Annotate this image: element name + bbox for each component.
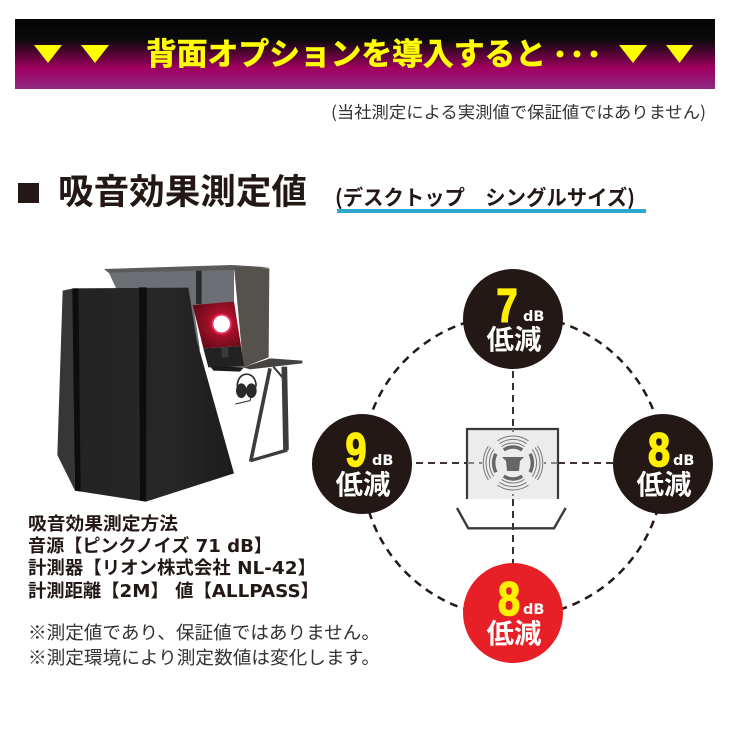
- banner dots: [556, 50, 598, 58]
- badge: rear 8 dB: 低減: [486, 611, 542, 651]
- badge: left 9 dB: [312, 414, 412, 514]
- monitor stand and keyboard: [203, 346, 244, 367]
- notes: ※測定環境により測定数値は変化します。: [28, 644, 380, 670]
- desk top: [243, 358, 302, 369]
- badge: front 7 dB: [463, 269, 563, 369]
- diagram: room with speaker: [416, 371, 613, 564]
- icon: speaker with sound waves: [482, 432, 544, 494]
- badge: front 7 dB: 7: [496, 279, 518, 332]
- badge: rear 8 dB: 8: [498, 572, 520, 625]
- monitor: [193, 302, 241, 348]
- badge: right 8 dB: [613, 414, 713, 514]
- back panel side: [234, 267, 269, 367]
- room box: [467, 429, 558, 499]
- badge: left 9 dB: 低減: [336, 462, 391, 502]
- badge: left 9 dB: dB: [372, 453, 393, 469]
- icon: left triangles: [34, 45, 109, 63]
- notes: ※測定値であり、保証値ではありません。: [28, 619, 380, 645]
- subheading with underline: (デスクトップ シングルサイズ): [335, 182, 635, 212]
- heading text: 吸音効果測定値: [58, 164, 307, 215]
- badge: right 8 dB: 低減: [636, 462, 692, 502]
- badge: front 7 dB: dB: [523, 309, 544, 325]
- badge: right 8 dB: dB: [673, 453, 694, 469]
- badge: rear 8 dB: [463, 563, 563, 663]
- dashed axes: [416, 371, 613, 564]
- product photo: desk with sound panels: [57, 265, 302, 502]
- measurement method text: [28, 513, 319, 602]
- desk outline: [457, 508, 566, 528]
- badge: front 7 dB: 低減: [486, 317, 542, 357]
- measurement method text: 計測器【リオン株式会社 NL-42】: [28, 558, 316, 579]
- banner: [15, 19, 715, 89]
- icon: square bullet: [18, 183, 39, 203]
- notes: [28, 619, 380, 670]
- badge: rear 8 dB: dB: [523, 602, 544, 618]
- badge: right 8 dB: 8: [648, 423, 670, 476]
- front panel seams: [72, 288, 81, 492]
- disclaimer note: (当社測定による実測値で保証値ではありません): [331, 99, 706, 123]
- front panel left face: [57, 288, 75, 491]
- front panel main face: [73, 288, 234, 502]
- back panel interior: [108, 267, 234, 350]
- badge: left 9 dB: 9: [346, 423, 366, 476]
- dashed measurement circle: [362, 315, 664, 617]
- measurement method text: 音源【ピンクノイズ 71 dB】: [28, 535, 272, 557]
- desk legs: [251, 367, 287, 462]
- icon: right triangles: [619, 45, 693, 63]
- measurement method text: 計測距離【2M】 値【ALLPASS】: [28, 581, 319, 602]
- headphones: [235, 374, 257, 404]
- section heading: [18, 164, 307, 215]
- banner heading: 背面オプションを導入すると: [146, 29, 546, 74]
- back panel top edge: [104, 265, 270, 273]
- measurement method text: 吸音効果測定方法: [28, 513, 178, 535]
